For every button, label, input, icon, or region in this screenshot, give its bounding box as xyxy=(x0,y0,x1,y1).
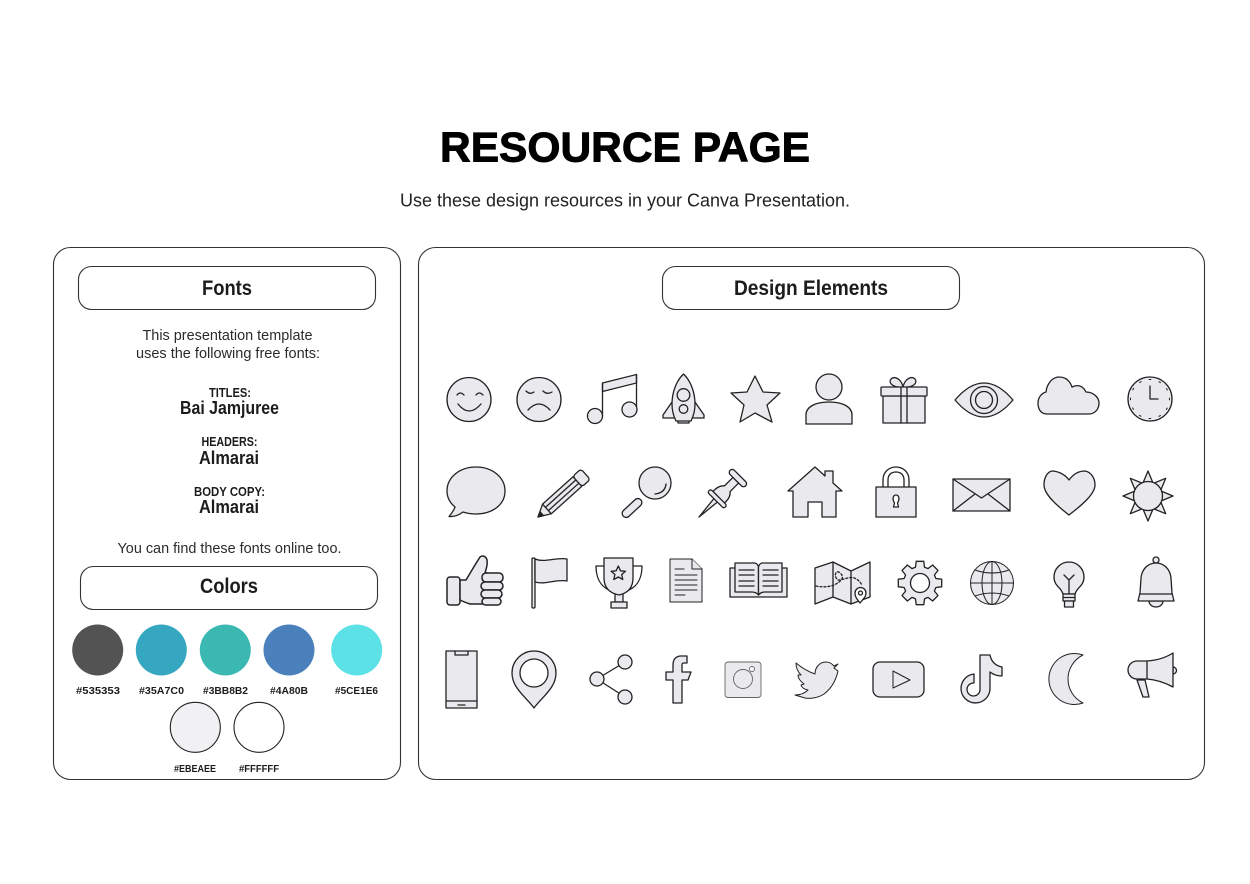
icon: folded map xyxy=(815,562,870,604)
color swatch: FFFFFF: #FFFFFF xyxy=(239,763,280,775)
icon: gear xyxy=(898,561,942,605)
icon: clock xyxy=(1128,377,1172,421)
heading: colors: Colors xyxy=(200,575,258,598)
text block: titles font xyxy=(180,386,279,418)
icon: sad face xyxy=(517,378,561,422)
color swatch: 35A7C0 xyxy=(136,624,187,697)
text block: font note: You can find these fonts online too. xyxy=(118,541,342,557)
text block: titles font: TITLES: xyxy=(209,386,251,400)
icon: cloud xyxy=(1038,377,1099,414)
color swatch: 4A80B xyxy=(264,624,314,697)
text block: body copy font xyxy=(194,485,265,517)
color swatch: 4A80B: #4A80B xyxy=(270,685,308,697)
title: RESOURCE PAGE xyxy=(440,124,810,170)
icon: flag xyxy=(532,558,567,608)
icon: push pin xyxy=(691,468,748,525)
panel: fonts and colors xyxy=(54,248,400,780)
text block: font intro xyxy=(136,328,320,362)
icon: youtube xyxy=(873,662,924,697)
icon: star xyxy=(731,376,780,422)
text block: font intro: uses the following free fonts: xyxy=(136,346,320,362)
heading: colors xyxy=(80,566,378,610)
icon: sun xyxy=(1123,471,1173,521)
color swatch: EBEAEE: #EBEAEE xyxy=(174,763,216,775)
icon: facebook xyxy=(666,656,691,703)
icon: padlock xyxy=(876,467,916,517)
text block: headers font: HEADERS: xyxy=(202,435,258,449)
icon: light bulb xyxy=(1054,562,1084,607)
icon: moon xyxy=(1049,654,1083,705)
color swatch: 5CE1E6 xyxy=(331,624,382,697)
text block: font intro: This presentation template xyxy=(142,328,312,344)
color swatch: 535353 xyxy=(72,624,123,697)
icon: bell xyxy=(1138,557,1174,607)
icon: instagram xyxy=(725,662,761,698)
panel: design elements xyxy=(418,248,1204,780)
icon: megaphone xyxy=(1128,653,1177,697)
icon: thumbs up xyxy=(447,556,503,605)
text block: headers font: Almarai xyxy=(199,448,259,468)
color swatch: 35A7C0: #35A7C0 xyxy=(139,685,184,697)
icon: heart xyxy=(1044,471,1095,515)
icon: location pin xyxy=(512,651,556,708)
icon: person xyxy=(806,374,852,424)
color swatch: 3BB8B2 xyxy=(200,624,251,697)
color swatch: EBEAEE xyxy=(170,702,220,775)
icon: twitter xyxy=(795,662,838,698)
icon: magnifier xyxy=(620,467,671,519)
heading: fonts xyxy=(78,266,376,310)
icon: pencil xyxy=(533,469,590,522)
icon: music note xyxy=(588,374,637,424)
icon: document xyxy=(670,559,702,602)
icon: smartphone xyxy=(446,651,477,708)
heading: fonts: Fonts xyxy=(202,277,252,300)
subtitle: Use these design resources in your Canva Presentation. xyxy=(400,190,850,210)
text block: body copy font: BODY COPY: xyxy=(194,485,265,499)
heading: design elements xyxy=(662,266,960,310)
icon: eye xyxy=(955,383,1013,417)
text block: headers font xyxy=(199,435,259,468)
icon: share xyxy=(590,655,632,704)
icon: envelope xyxy=(953,479,1010,511)
icon: speech bubble xyxy=(447,467,505,517)
icon: tiktok xyxy=(961,655,1002,703)
icon: trophy xyxy=(596,558,642,608)
icon: open book xyxy=(730,563,787,597)
heading: design elements: Design Elements xyxy=(734,277,888,300)
color swatch: 535353: #535353 xyxy=(76,685,120,697)
color swatch: 3BB8B2: #3BB8B2 xyxy=(203,685,248,697)
icon: rocket xyxy=(663,374,704,423)
color swatch: 5CE1E6: #5CE1E6 xyxy=(335,685,378,697)
icon: gift xyxy=(881,378,927,423)
icon: globe xyxy=(970,562,1014,604)
text block: titles font: Bai Jamjuree xyxy=(180,398,279,418)
icon: smiley xyxy=(447,378,491,422)
text block: body copy font: Almarai xyxy=(199,497,259,517)
color swatch: FFFFFF xyxy=(234,702,284,775)
icon: house xyxy=(788,467,842,517)
